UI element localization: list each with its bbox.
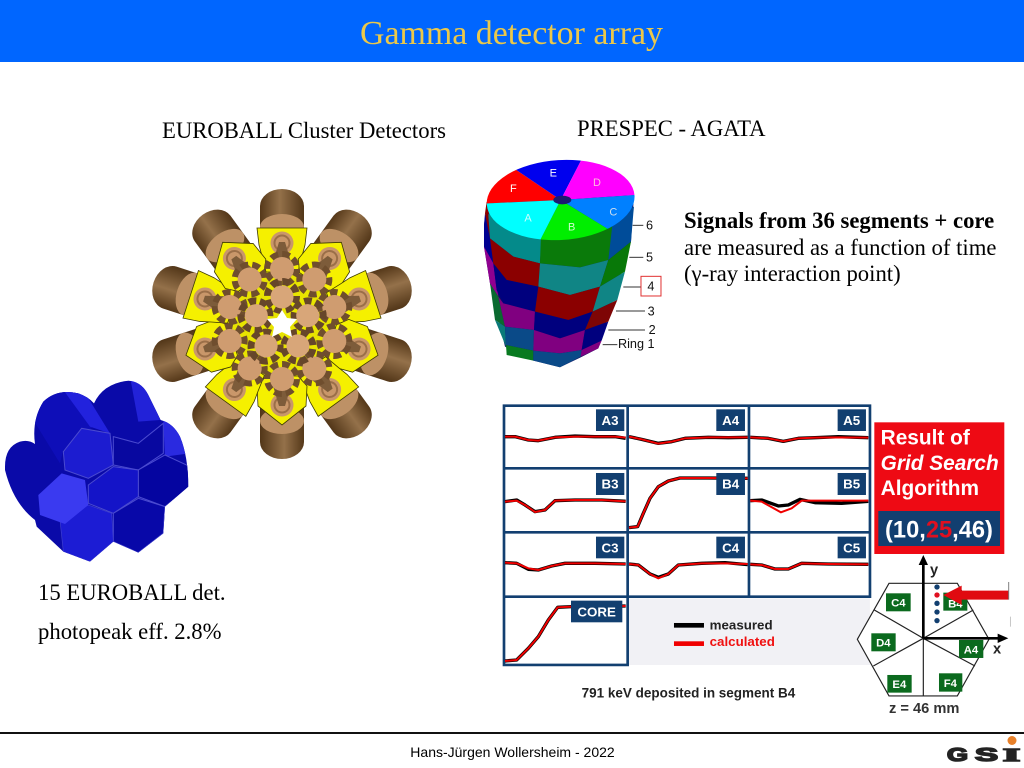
chart: segment signal traces: C3 bbox=[601, 540, 619, 555]
diagram: AGATA segmented crystal bbox=[484, 160, 662, 368]
diagram: hexagonal crystal cross-section bbox=[857, 555, 1011, 717]
red arrow bbox=[943, 586, 1008, 605]
chart: segment signal traces: CORE bbox=[577, 604, 616, 619]
chart: segment signal traces: A5 bbox=[843, 413, 861, 428]
caption: 791 keV deposited in segment B4 bbox=[582, 685, 796, 700]
ring labels bbox=[603, 218, 661, 351]
top face segments: D bbox=[593, 177, 601, 189]
ring labels: 4 bbox=[647, 279, 654, 293]
callout: grid search result bbox=[874, 422, 1004, 554]
diagram: hexagonal crystal cross-section: C4 bbox=[891, 598, 906, 610]
top face segments: A bbox=[524, 212, 532, 224]
diagram: hexagonal crystal cross-section: z = 46 mm bbox=[889, 701, 959, 717]
ring segments bbox=[488, 200, 634, 367]
top face segments: C bbox=[609, 207, 617, 219]
diagram: hexagonal crystal cross-section: A4 bbox=[964, 644, 979, 656]
chart: segment signal traces: A4 bbox=[722, 413, 740, 428]
top face segments: F bbox=[510, 183, 517, 195]
diagram: hexagonal crystal cross-section: B4 bbox=[948, 598, 963, 610]
callout: grid search result: Grid Search bbox=[881, 452, 999, 475]
heading: PRESPEC - AGATA: PRESPEC - AGATA bbox=[577, 116, 766, 141]
diagram: EUROBALL cluster array bbox=[147, 189, 417, 459]
top face segments bbox=[486, 160, 635, 240]
calculated traces bbox=[505, 437, 868, 661]
chart: segment signal traces: C5 bbox=[843, 540, 861, 555]
ring labels: 5 bbox=[646, 250, 653, 264]
chart: segment signal traces: C4 bbox=[722, 540, 740, 555]
trace labels bbox=[571, 409, 866, 622]
ring labels: 6 bbox=[646, 218, 653, 232]
legend: measured bbox=[710, 618, 773, 633]
diagram: hexagonal crystal cross-section: E4 bbox=[892, 679, 907, 691]
logo: GSI bbox=[947, 736, 1020, 765]
legend: calculated bbox=[710, 634, 775, 649]
segment labels bbox=[871, 593, 983, 693]
ring labels: 2 bbox=[649, 323, 656, 337]
callout: grid search result: Result of bbox=[881, 426, 970, 449]
logo: GSI: G bbox=[947, 745, 968, 765]
header band bbox=[0, 0, 1024, 62]
legend background bbox=[628, 598, 870, 665]
text: photopeak eff. 2.8%: photopeak eff. 2.8% bbox=[38, 619, 222, 644]
diagram: hexagonal crystal cross-section: y bbox=[930, 562, 939, 578]
diagram: hexagonal crystal cross-section: D4 bbox=[876, 638, 891, 650]
legend bbox=[674, 618, 775, 649]
ring labels: 3 bbox=[648, 304, 655, 318]
chart: segment signal traces: B3 bbox=[601, 477, 619, 492]
text: signals description: are measured as a function of time bbox=[684, 235, 996, 260]
text: signals description: (γ-ray interaction point) bbox=[684, 261, 901, 286]
footer credit: Hans-Jürgen Wollersheim - 2022 bbox=[410, 744, 615, 760]
top face segments: E bbox=[550, 168, 557, 180]
ring labels: Ring 1 bbox=[618, 337, 655, 351]
chart: segment signal traces bbox=[504, 406, 870, 700]
chart: segment signal traces: B5 bbox=[843, 477, 861, 492]
callout: grid search result: (10,25,46) bbox=[885, 517, 993, 543]
diagram: hexagonal crystal cross-section: x bbox=[993, 642, 1002, 658]
diagram: blue cluster detector bbox=[5, 380, 188, 562]
text: signals description: Signals from 36 segments + core bbox=[684, 208, 994, 233]
measured traces bbox=[505, 436, 868, 661]
chart: segment signal traces: B4 bbox=[722, 477, 740, 492]
grid points bbox=[934, 584, 940, 623]
callout: grid search result: Algorithm bbox=[881, 477, 979, 500]
diagram: hexagonal crystal cross-section: F4 bbox=[944, 678, 958, 690]
chart: segment signal traces: A3 bbox=[601, 413, 619, 428]
trace grid frame bbox=[504, 406, 870, 665]
logo: GSI: I bbox=[1003, 745, 1020, 765]
title: Gamma detector array bbox=[360, 15, 663, 52]
top face segments: B bbox=[568, 221, 575, 233]
axes bbox=[923, 563, 1000, 638]
footer rule bbox=[0, 732, 1024, 734]
logo: GSI: S bbox=[975, 745, 998, 765]
heading: EUROBALL Cluster Detectors: EUROBALL Cluster Detectors bbox=[162, 118, 446, 143]
text: 15 EUROBALL det.: 15 EUROBALL det. bbox=[38, 580, 226, 605]
text: signals description bbox=[684, 208, 996, 286]
